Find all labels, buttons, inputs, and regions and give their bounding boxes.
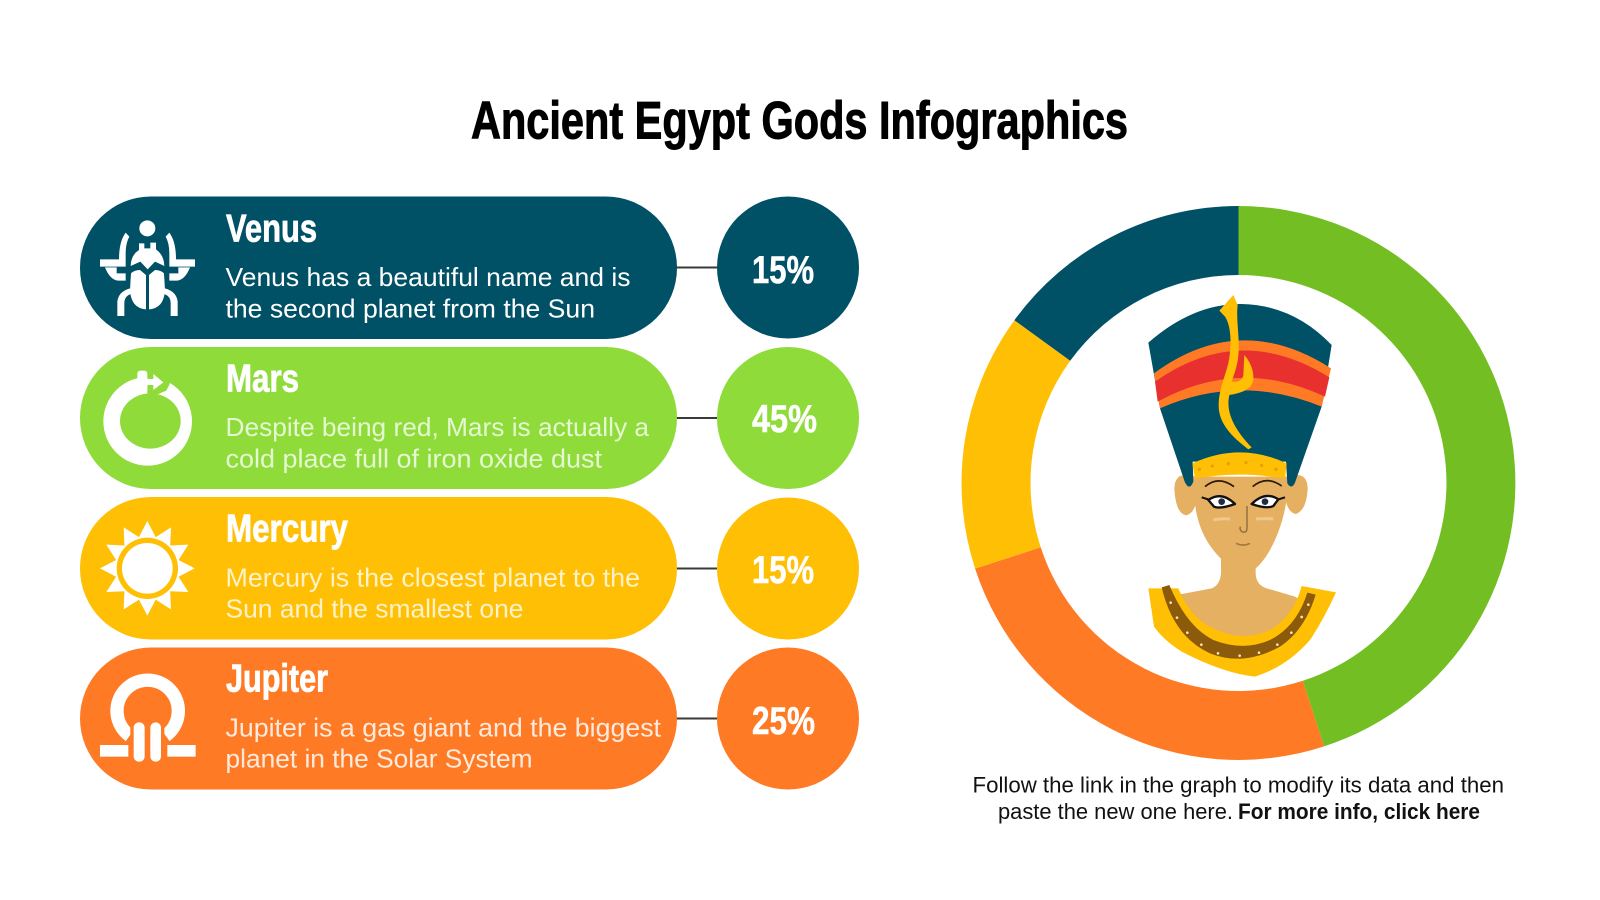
connector line xyxy=(676,568,717,570)
percent circle xyxy=(717,648,859,790)
pill xyxy=(80,196,677,339)
icon: ring xyxy=(103,368,192,466)
description: Mercury is the closest planet to the xyxy=(226,562,640,592)
description xyxy=(226,562,640,624)
percent: 15% xyxy=(752,249,814,292)
connector line xyxy=(676,417,717,419)
segment: green 45% xyxy=(1238,206,1515,746)
description: Venus has a beautiful name and is xyxy=(226,262,630,292)
necklace band xyxy=(1162,585,1316,659)
footnote: Follow the link in the graph to modify its data and then xyxy=(972,773,1504,798)
percent: 45% xyxy=(752,398,817,441)
description xyxy=(226,712,662,774)
icon: scarab xyxy=(100,220,195,316)
percent: 25% xyxy=(752,700,815,743)
heading: Venus xyxy=(226,208,317,250)
panel: Venus xyxy=(80,196,859,339)
segment: orange 25% xyxy=(975,547,1324,760)
ears xyxy=(1174,475,1308,515)
crown xyxy=(1148,304,1332,487)
title: Ancient Egypt Gods Infographics xyxy=(471,92,1128,150)
percent circle xyxy=(717,347,859,489)
connector line xyxy=(676,266,717,268)
description xyxy=(226,262,630,323)
pill xyxy=(80,347,677,489)
description: Sun and the smallest one xyxy=(226,594,524,624)
illustration: Nefertiti bust xyxy=(1148,295,1336,677)
footnote: For more info, click here xyxy=(1238,799,1480,824)
icon: shen ring xyxy=(100,680,196,765)
description: planet in the Solar System xyxy=(226,744,532,774)
heading: Jupiter xyxy=(226,658,328,700)
footnote xyxy=(972,773,1504,824)
percent circle xyxy=(717,196,859,338)
heading: Mars xyxy=(226,358,299,400)
pill xyxy=(80,648,677,790)
necklace beads xyxy=(1169,601,1310,657)
percent circle xyxy=(717,498,859,640)
diadem dots xyxy=(1198,461,1278,471)
chest and neck xyxy=(1177,550,1300,638)
crown red stripe xyxy=(1155,351,1329,402)
description: the second planet from the Sun xyxy=(226,293,595,323)
collar xyxy=(1148,586,1336,677)
pill xyxy=(80,497,677,640)
icon: sun xyxy=(100,521,195,616)
segment: navy 15% xyxy=(1014,206,1238,361)
description: Jupiter is a gas giant and the biggest xyxy=(226,712,662,742)
percent: 15% xyxy=(752,549,814,592)
donut chart xyxy=(962,206,1515,760)
diadem xyxy=(1192,452,1287,479)
connector line xyxy=(676,718,717,720)
face xyxy=(1193,477,1288,568)
panel: Mercury xyxy=(80,497,859,640)
footnote: paste the new one here. xyxy=(998,799,1233,824)
crown band xyxy=(1154,340,1331,408)
uraeus xyxy=(1219,295,1253,449)
description: Despite being red, Mars is actually a xyxy=(226,412,650,442)
description xyxy=(226,412,650,473)
heading: Mercury xyxy=(226,508,348,550)
eyes and facial features xyxy=(1202,481,1285,545)
description: cold place full of iron oxide dust xyxy=(226,443,603,473)
segment: yellow 15% xyxy=(962,320,1070,569)
panel: Mars xyxy=(80,347,859,489)
panel: Jupiter xyxy=(80,648,859,790)
